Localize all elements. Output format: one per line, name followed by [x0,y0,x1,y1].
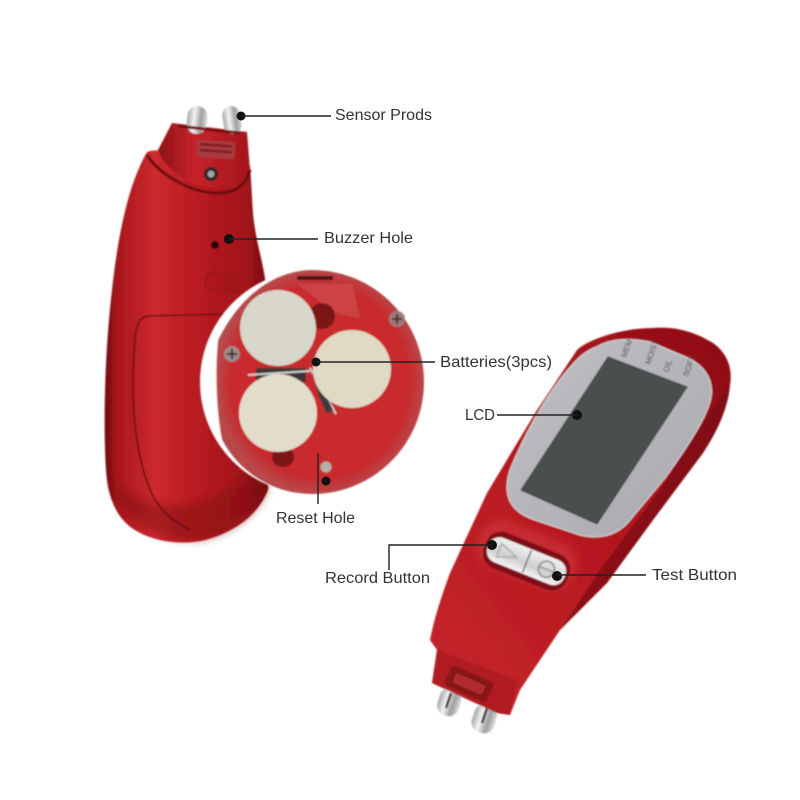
bezel labels: MEM [619,338,634,359]
callout: Record Button [325,540,497,587]
callout: Sensor Prods: Sensor Prods [335,107,432,124]
rear device body [105,150,272,543]
body lower shadow [108,440,272,541]
CE mark: CE [202,266,241,298]
white crescent [200,270,424,494]
magnified battery compartment [200,270,424,494]
device: rear view with probes [105,105,272,543]
grey LCD bezel [507,339,711,537]
side shadow [560,385,730,630]
top slot [297,276,333,280]
sensor prods, front device [435,685,500,736]
screw right [389,311,405,327]
recess dark [309,303,335,329]
callout: Batteries(3pcs) [312,354,552,371]
rear device neck [158,123,250,188]
buzzer holes [211,241,219,249]
wires [248,368,336,414]
callout: Reset Hole [276,453,355,527]
callout: Sensor Prods [236,107,432,124]
probe slot [444,665,494,703]
button surround glow [470,513,584,597]
callout: Test Button: Test Button [652,567,737,584]
probe slot [196,140,235,159]
LCD screen [521,357,687,524]
callout: Record Button: Record Button [325,570,430,587]
silver buttons [483,534,570,589]
sensor prods, rear device [178,105,243,135]
compartment red area [216,270,424,494]
callout: Reset Hole: Reset Hole [276,510,355,527]
callout: Batteries(3pcs): Batteries(3pcs) [440,354,552,371]
button recess shadow [478,527,575,595]
device: front view with LCD [430,328,731,736]
recess bottom [272,447,294,467]
bezel labels [619,338,697,378]
reset metal pin [320,462,332,472]
bezel labels: MOIST [643,339,661,366]
battery 2 [313,330,391,408]
callout: LCD: LCD [465,407,495,424]
battery 1 [240,290,316,366]
bezel labels: SOFT [681,354,697,378]
bezel labels: OIL [661,358,674,374]
top lighter panel [298,284,360,318]
callout: LCD [465,407,582,424]
neck seam [147,155,250,193]
head face [432,650,517,715]
battery 3 [239,374,317,452]
callout: Buzzer Hole [224,230,413,247]
front device body [430,328,731,715]
screw, neck [204,167,218,181]
battery cover seam [133,314,225,530]
callout: Test Button [552,567,737,584]
screw left [224,346,240,362]
callout: Buzzer Hole: Buzzer Hole [324,230,413,247]
